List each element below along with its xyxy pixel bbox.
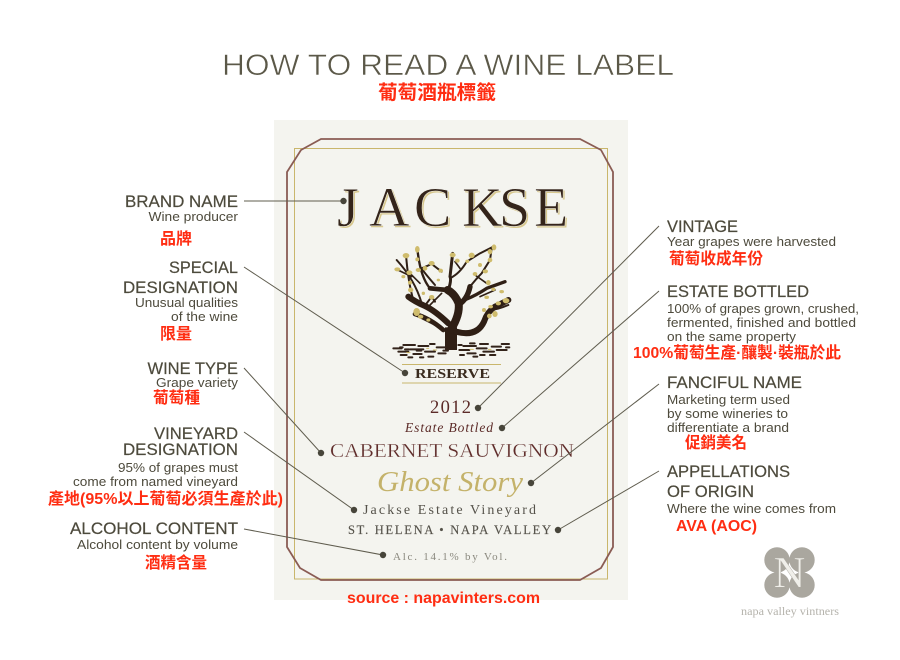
callout: vintage: VINTAGE [667, 218, 738, 236]
maroon outer frame [287, 139, 613, 580]
callout: alcohol content [70, 520, 386, 572]
callout: special designation: of the wine [171, 310, 238, 324]
callout: special designation: DESIGNATION [123, 279, 238, 297]
panel: wine label [274, 120, 628, 600]
title: HOW TO READ A WINE LABEL [222, 49, 674, 82]
reserve rule top [402, 364, 501, 365]
callout: special designation: SPECIAL [169, 259, 238, 277]
callout: special designation [123, 259, 408, 376]
callout: vineyard designation: VINEYARD [154, 425, 238, 443]
gold inner frame [294, 148, 608, 579]
callout: vineyard designation: DESIGNATION [123, 441, 238, 459]
callout: appellations of origin: APPELLATIONS [667, 463, 790, 481]
callout: brand name: BRAND NAME [125, 193, 238, 211]
label paper [274, 120, 628, 600]
callout: fanciful name: Marketing term used [667, 393, 790, 407]
callout: brand name: Wine producer [148, 210, 238, 224]
chinese title: 葡萄酒瓶標籤 [378, 81, 496, 104]
callout: vintage [475, 218, 836, 411]
estate bottled text: Estate Bottled [404, 420, 493, 435]
callout: vineyard designation [48, 425, 357, 513]
callout: wine type: 葡萄種 [153, 389, 200, 407]
callout: fanciful name: differentiate a brand [667, 421, 789, 435]
callout: estate bottled: ESTATE BOTTLED [667, 283, 809, 301]
callout: vineyard designation: 產地(95%以上葡萄必須生產於此) [48, 489, 283, 508]
reserve text: RESERVE [415, 367, 490, 382]
callout: fanciful name: FANCIFUL NAME [667, 374, 802, 392]
callout: special designation: 限量 [160, 325, 192, 343]
callout: appellations of origin [555, 463, 836, 535]
callout: special designation: Unusual qualities [135, 296, 238, 310]
vintage year: 2012 [430, 398, 471, 418]
icon: vine tree [393, 244, 509, 357]
brand wordmark shadow: JACKSE [338, 178, 570, 240]
logo: napa valley vintners: N [774, 548, 805, 597]
callout: appellations of origin: AVA (AOC) [676, 518, 757, 535]
callout: wine type: Grape variety [156, 376, 239, 390]
callout: estate bottled: fermented, finished and bottled [667, 316, 856, 330]
callout: wine type: WINE TYPE [148, 360, 238, 378]
callout: vintage: Year grapes were harvested [667, 235, 836, 249]
logo: napa valley vintners [741, 547, 839, 618]
callout: fanciful name: by some wineries to [667, 407, 788, 421]
callout: estate bottled: 100% of grapes grown, crushed, [667, 302, 859, 316]
callout: alcohol content: ALCOHOL CONTENT [70, 520, 238, 538]
callout: estate bottled: 100%葡萄生產·釀製·裝瓶於此 [633, 343, 841, 362]
logo: napa valley vintners: napa valley vintners [741, 604, 839, 618]
callout: vineyard designation: come from named vineyard [73, 475, 238, 489]
origin text: ST. HELENA • NAPA VALLEY [348, 523, 551, 537]
callout: appellations of origin: OF ORIGIN [667, 483, 754, 501]
callout: wine type [148, 360, 324, 456]
source credit: source : napavinters.com [347, 590, 540, 607]
wine type text: CABERNET SAUVIGNON [330, 440, 574, 462]
callout: brand name [125, 193, 347, 248]
callout: fanciful name [528, 374, 802, 486]
callout: brand name: 品牌 [160, 230, 192, 248]
fanciful name text: Ghost Story [377, 467, 524, 498]
callout: fanciful name: 促銷美名 [685, 433, 747, 452]
callout: vineyard designation: 95% of grapes must [118, 461, 239, 475]
callout: estate bottled [499, 283, 859, 431]
callout: appellations of origin: Where the wine comes from [667, 502, 836, 516]
brand wordmark: JACKSE [337, 177, 568, 239]
vineyard text: Jackse Estate Vineyard [363, 503, 536, 518]
callout: estate bottled: on the same property [667, 330, 797, 344]
callout: alcohol content: 酒精含量 [145, 553, 207, 572]
alcohol text: Alc. 14.1% by Vol. [393, 551, 507, 563]
reserve rule bottom [402, 382, 501, 384]
callout: vintage: 葡萄收成年份 [669, 249, 763, 268]
callout: alcohol content: Alcohol content by volume [77, 538, 238, 552]
